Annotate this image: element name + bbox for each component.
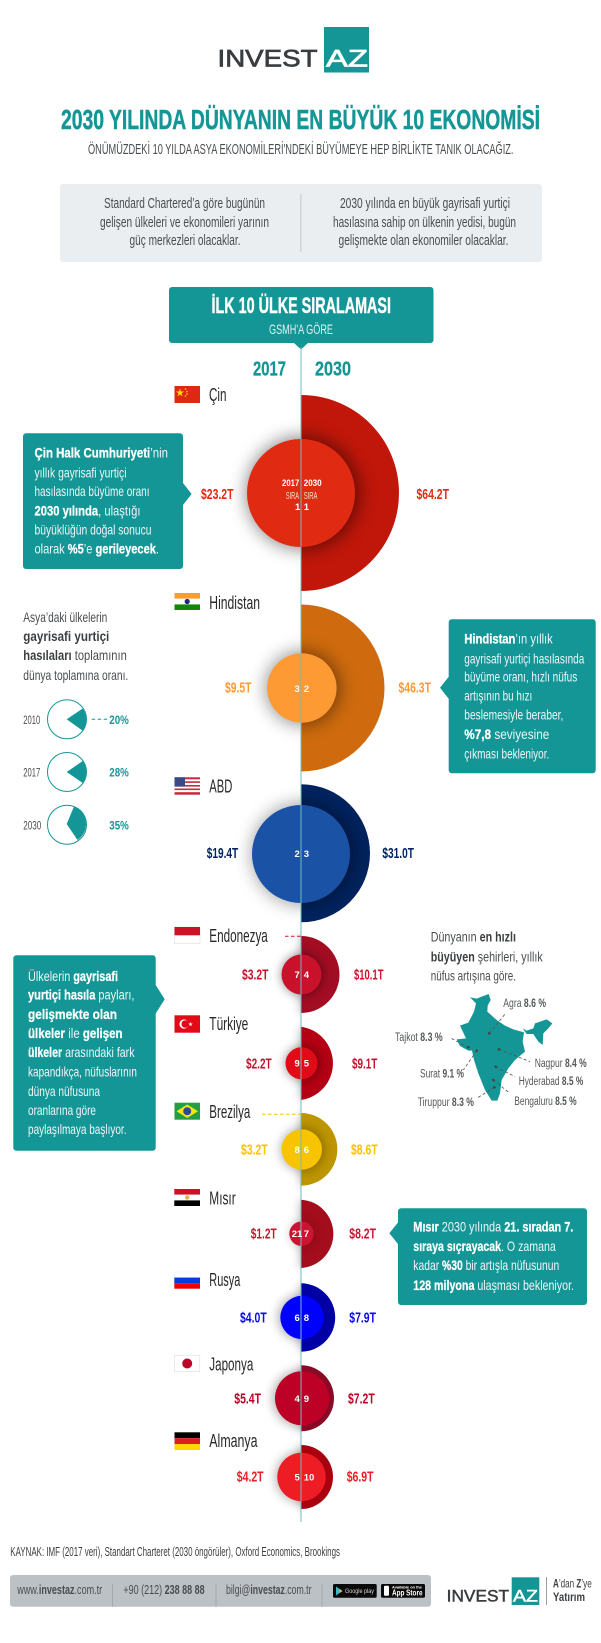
- city labels: Agra 8.6 %: [503, 998, 546, 1010]
- callout: developing vs developed: kapandıkça, nüfuslarının: [28, 1064, 137, 1080]
- bubble: India: [266, 604, 385, 772]
- city labels: Tajkot 8.3 %: [395, 1032, 443, 1044]
- callout: India: çıkması bekleniyor.: [464, 745, 549, 761]
- ranks: Russia: [294, 1313, 309, 1324]
- flag: India: [174, 593, 200, 610]
- text: fastest growing cities: Dünyanın en hızlı: [431, 929, 516, 945]
- panel: ranking header: [169, 287, 434, 350]
- bubble: Turkey: [285, 1027, 333, 1100]
- dashed connector: Indonesia: [285, 935, 301, 937]
- bubble: Egypt: [288, 1200, 333, 1268]
- value 2030: Egypt: $8.2T: [349, 1227, 376, 1243]
- callout: India: artışının bu hızı: [464, 688, 532, 704]
- callout: India: beslemesiyle beraber,: [464, 706, 563, 722]
- callout: developing vs developed: gelişmekte olan: [28, 1006, 117, 1022]
- flag: USA: [174, 777, 200, 795]
- bubble: Indonesia: [281, 936, 340, 1013]
- city labels: Bengaluru 8.5 %: [514, 1096, 577, 1108]
- ranks: China: [282, 478, 322, 513]
- badge: Google Play: Google play: [345, 1588, 375, 1595]
- callout: developing vs developed: dünya nüfusuna: [28, 1083, 100, 1099]
- dashed connector: Brazil: [262, 1113, 301, 1115]
- ranks: India: 2: [304, 684, 309, 695]
- intro text left: [100, 196, 269, 249]
- value 2030: Germany: $6.9T: [347, 1470, 374, 1486]
- callout: Egypt: kadar %30 bir artışla nüfusunun: [413, 1257, 559, 1273]
- intro text right: [333, 196, 516, 249]
- panel: intro: [60, 184, 542, 262]
- tagline: A’dan Z’ye: [553, 1577, 592, 1591]
- ranks: Turkey: 9: [294, 1058, 300, 1070]
- badge: Google Play: [333, 1584, 377, 1598]
- callout: Egypt: sıraya sıçrayacak. O zamana: [413, 1238, 556, 1254]
- ranks: China: SIRA: [286, 491, 299, 502]
- country name: Çin: Çin: [209, 385, 226, 405]
- badge: App Store: App Store: [392, 1588, 423, 1598]
- pie: 2017: 2017: [23, 766, 41, 780]
- logo: Investaz: INVEST: [218, 46, 318, 73]
- intro text right: gelişmekte olan ekonomiler olacaklar.: [338, 233, 508, 249]
- ranks: Indonesia: 4: [304, 970, 310, 981]
- bubble: Brazil: [280, 1113, 337, 1186]
- city labels: Tiruppur 8.3 %: [418, 1097, 474, 1109]
- callout: China: büyüklüğün doğal sonucu: [34, 522, 152, 538]
- logo: Investaz: AZ: [326, 46, 368, 73]
- callout: Egypt: [389, 1208, 587, 1305]
- callout: India: [440, 619, 596, 773]
- pie: 2010: 20%: [109, 713, 129, 727]
- tagline: Yatırım: [553, 1590, 585, 1604]
- value 2030: Indonesia: $10.1T: [354, 968, 384, 984]
- callout: developing vs developed: oranlarına göre: [28, 1102, 96, 1118]
- value 2017: Brazil: $3.2T: [241, 1142, 268, 1158]
- value 2030: Turkey: $9.1T: [352, 1056, 377, 1072]
- bubble: China: [247, 395, 399, 591]
- value 2030: China: $64.2T: [416, 487, 449, 503]
- callout: developing vs developed: [13, 955, 165, 1151]
- value 2017: Germany: $4.2T: [237, 1470, 264, 1486]
- city labels: Surat 9.1 %: [420, 1068, 464, 1080]
- text: Asia share: dünya toplamına oranı.: [23, 667, 128, 683]
- country name: Almanya: Almanya: [209, 1431, 258, 1451]
- country name: Hindistan: Hindistan: [209, 593, 260, 613]
- ranks: India: [294, 684, 309, 695]
- callout: China: [23, 433, 192, 569]
- callout: India: Hindistan’ın yıllık: [464, 630, 554, 646]
- intro text right: 2030 yılında en büyük gayrisafi yurtiçi: [340, 196, 510, 212]
- country name: ABD: ABD: [209, 777, 232, 797]
- panel: ranking header: GSMH'A GÖRE: [269, 320, 333, 337]
- ranks: China: 1: [304, 502, 310, 513]
- ranks: Germany: 5: [294, 1472, 300, 1484]
- callout: China: yıllık gayrisafi yurtiçi: [34, 464, 126, 480]
- ranks: Brazil: 8: [294, 1145, 300, 1156]
- website: www.investaz.com.tr: [17, 1582, 103, 1597]
- flag: Germany: [174, 1432, 200, 1450]
- logo: Investaz: [218, 27, 369, 73]
- flag: Brazil: [174, 1103, 200, 1120]
- ranks: Egypt: 7: [304, 1229, 309, 1240]
- ranks: Brazil: [294, 1145, 309, 1156]
- pie: 2030: 2030: [23, 818, 42, 832]
- callout: India: %7,8 seviyesine: [464, 726, 549, 742]
- badge: App Store: Available on the: [392, 1584, 423, 1589]
- city labels: Nagpur 8.4 %: [535, 1058, 587, 1070]
- callout: developing vs developed: ülkeler ile gelişen: [28, 1025, 122, 1041]
- year heading 2017: 2017: [253, 358, 286, 380]
- value 2017: Turkey: $2.2T: [246, 1056, 272, 1072]
- phone: +90 (212) 238 88 88: [123, 1582, 205, 1597]
- ranks: China: SIRA: [304, 491, 318, 502]
- value 2017: USA: $19.4T: [207, 846, 238, 862]
- callout: developing vs developed: Ülkelerin gayrisafi: [28, 967, 118, 984]
- email: bilgi@investaz.com.tr: [226, 1582, 312, 1597]
- text: Asia share: gayrisafi yurtiçi: [23, 628, 109, 644]
- text: fastest growing cities: büyüyen şehirleri, yıllık: [431, 949, 543, 965]
- intro text left: Standard Chartered’a göre bugünün: [104, 196, 265, 212]
- flag: Egypt: [174, 1189, 200, 1206]
- callout: China: hasılasında büyüme oranı: [34, 483, 150, 499]
- flag: Turkey: [174, 1015, 200, 1033]
- city labels: [395, 998, 587, 1109]
- source note: KAYNAK: IMF (2017 veri), Standart Charteret (2030 öngörüler), Oxford Economics, Brookings: [10, 1544, 340, 1559]
- ranks: China: 2017: [282, 478, 299, 489]
- callout: developing vs developed: ülkeler arasındaki fark: [28, 1044, 135, 1060]
- ranks: Turkey: 5: [304, 1058, 310, 1070]
- pie: 2010: 2010: [23, 713, 41, 727]
- ranks: Russia: 6: [294, 1313, 300, 1324]
- logo: Investaz footer: INVEST: [447, 1587, 509, 1606]
- text: fastest growing cities: [431, 929, 543, 984]
- ranks: India: 3: [294, 684, 300, 695]
- value 2030: Russia: $7.9T: [349, 1310, 376, 1326]
- city labels: Hyderabad 8.5 %: [519, 1076, 583, 1088]
- ranks: Egypt: 21: [292, 1229, 303, 1240]
- ranks: Japan: 4: [294, 1394, 300, 1405]
- flag: Russia: [174, 1272, 200, 1289]
- panel: ranking header: İLK 10 ÜLKE SIRALAMASI: [212, 293, 391, 318]
- city leader lines: [450, 1013, 530, 1098]
- ranks: China: 1: [295, 502, 301, 513]
- ranks: Russia: 8: [304, 1313, 309, 1324]
- value 2017: Indonesia: $3.2T: [242, 968, 269, 984]
- ranks: Egypt: [292, 1229, 309, 1240]
- value 2030: USA: $31.0T: [382, 846, 414, 862]
- bubble: Germany: [276, 1445, 333, 1509]
- callout: China: 2030 yılında, ulaştığı: [34, 502, 140, 518]
- ranks: China: 2030: [304, 478, 322, 489]
- ranks: USA: 3: [304, 849, 309, 860]
- country name: Brezilya: Brezilya: [209, 1102, 251, 1122]
- center axis: [300, 347, 302, 1522]
- ranks: Japan: 9: [304, 1394, 309, 1405]
- country name: Mısır: Mısır: [209, 1188, 236, 1208]
- text: fastest growing cities: nüfus artışına göre.: [431, 968, 516, 984]
- badge: App Store: [381, 1584, 425, 1598]
- tagline: [553, 1577, 592, 1604]
- ranks: Indonesia: 7: [294, 970, 300, 981]
- ranks: USA: [294, 849, 309, 860]
- flag: Japan: [174, 1355, 200, 1372]
- value 2017: China: $23.2T: [201, 487, 234, 503]
- callout: China: Çin Halk Cumhuriyeti’nin: [34, 444, 168, 460]
- pie: 2030: [23, 805, 129, 844]
- logo: Investaz footer: AZ: [513, 1587, 538, 1606]
- ranks: Brazil: 6: [304, 1145, 309, 1156]
- ranks: USA: 2: [294, 849, 300, 860]
- ranks: Turkey: [294, 1058, 310, 1070]
- year heading 2030: 2030: [315, 358, 351, 380]
- text: Asia share: hasılaları toplamının: [23, 647, 127, 663]
- bubble: Japan: [272, 1365, 334, 1431]
- value 2017: India: $9.5T: [225, 681, 252, 697]
- ranks: Germany: [294, 1472, 314, 1484]
- bubble: USA: [252, 784, 370, 922]
- ranks: Indonesia: [294, 970, 310, 981]
- text: Asia share: [23, 609, 128, 683]
- country name: Japonya: Japonya: [209, 1355, 254, 1375]
- callout: developing vs developed: yurtiçi hasıla payları,: [28, 987, 134, 1003]
- intro text left: gelişen ülkeleri ve ekonomileri yarının: [100, 215, 269, 231]
- value 2017: Japan: $5.4T: [234, 1391, 261, 1407]
- pie: 2017: [23, 752, 129, 792]
- callout: China: olarak %5’e gerileyecek.: [34, 540, 159, 556]
- map: India with cities: [395, 994, 587, 1109]
- value 2017: Russia: $4.0T: [240, 1310, 267, 1326]
- flag: Indonesia: [174, 927, 200, 944]
- value 2030: Brazil: $8.6T: [351, 1142, 378, 1158]
- callout: developing vs developed: paylaşılmaya başlıyor.: [28, 1121, 126, 1137]
- country name: Türkiye: Türkiye: [209, 1014, 248, 1034]
- intro text left: güç merkezleri olacaklar.: [130, 233, 240, 249]
- map shape: [457, 994, 552, 1101]
- ranks: Japan: [294, 1394, 309, 1405]
- pie: 2030: 35%: [109, 818, 129, 832]
- logo: Investaz footer: [447, 1577, 592, 1606]
- footer contact bar: [10, 1575, 431, 1607]
- country name: Rusya: Rusya: [209, 1270, 241, 1290]
- country name: Endonezya: Endonezya: [209, 926, 268, 946]
- flag: China: [174, 386, 200, 403]
- ranks: Germany: 10: [304, 1472, 314, 1484]
- value 2030: Japan: $7.2T: [348, 1391, 375, 1407]
- callout: Egypt: Mısır 2030 yılında 21. sıradan 7.: [413, 1219, 573, 1235]
- pie: 2010: [23, 700, 129, 739]
- intro text right: hasılasına sahip on ülkenin yedisi, bugün: [333, 215, 516, 231]
- bubble: Russia: [278, 1283, 335, 1352]
- pie: 2017: 28%: [109, 766, 129, 780]
- value 2017: Egypt: $1.2T: [251, 1227, 277, 1243]
- text: Asia share: Asya’daki ülkelerin: [23, 609, 107, 625]
- value 2030: India: $46.3T: [398, 681, 431, 697]
- callout: Egypt: 128 milyona ulaşması bekleniyor.: [413, 1277, 574, 1293]
